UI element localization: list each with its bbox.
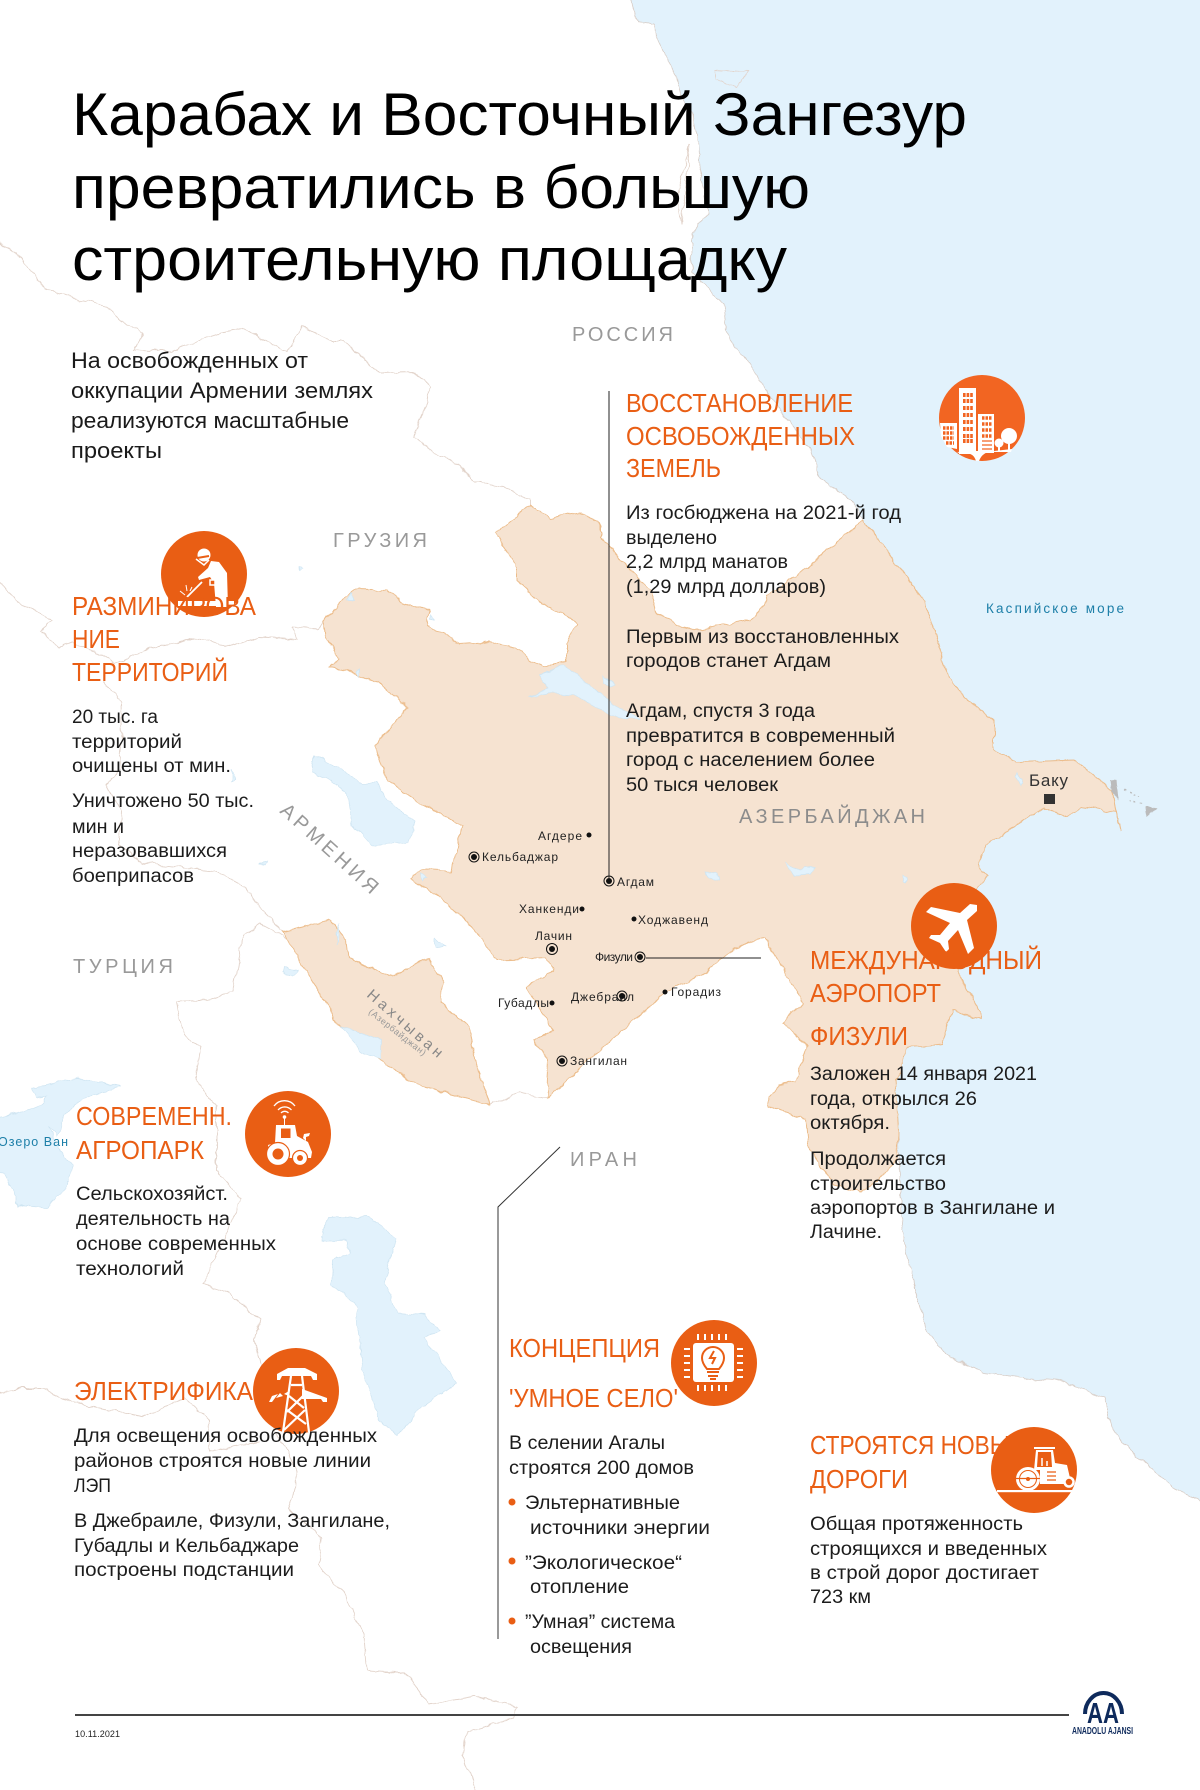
label: Baku: Баку xyxy=(1029,771,1068,790)
heading: agropark xyxy=(76,1103,232,1165)
city: Agdere: Агдере xyxy=(538,829,582,843)
icon: road roller xyxy=(991,1427,1077,1513)
text: electrification body: В Джебраиле, Физули, Зангилане, xyxy=(74,1511,390,1532)
icon: demining worker xyxy=(161,531,247,617)
text: airport body: аэропортов в Зангилане и xyxy=(810,1198,1055,1219)
panel: electrification xyxy=(74,1348,390,1581)
leader line: smart village xyxy=(498,1147,560,1639)
label: Baku xyxy=(1029,771,1068,804)
text: agropark body: основе современных xyxy=(76,1234,277,1255)
heading: restoration: ВОССТАНОВЛЕНИЕ xyxy=(626,390,853,418)
text: airport body: строительство xyxy=(810,1174,946,1195)
heading: smart village: 'УМНОЕ СЕЛО' xyxy=(509,1385,678,1413)
lakes xyxy=(0,566,1022,1435)
heading: smart village: КОНЦЕПЦИЯ xyxy=(509,1335,660,1363)
text: restoration body: городов станет Агдам xyxy=(626,651,831,672)
city: Zangilan: Зангилан xyxy=(570,1054,627,1068)
text: roads body: в строй дорог достигает xyxy=(810,1563,1039,1584)
text: airport body xyxy=(810,1064,1055,1243)
panel: smart village xyxy=(508,1320,757,1658)
city: Agdam: Агдам xyxy=(617,875,654,889)
text: smart village intro: строятся 200 домов xyxy=(509,1458,694,1479)
logo: Anadolu Ajansi: AA xyxy=(1087,1698,1119,1730)
text: smart village intro: В селении Агалы xyxy=(509,1433,665,1454)
label: Turkey: ТУРЦИЯ xyxy=(73,956,173,978)
text: roads body xyxy=(810,1514,1048,1608)
text: airport body: Заложен 14 января 2021 xyxy=(810,1064,1037,1085)
text: demining body: 20 тыс. га xyxy=(72,707,158,728)
intro text xyxy=(71,348,373,463)
intro text: реализуются масштабные xyxy=(71,408,349,433)
text: restoration body: 2,2 млрд манатов xyxy=(626,552,788,573)
text: airport body: Продолжается xyxy=(810,1149,946,1170)
logo: Anadolu Ajansi xyxy=(1072,1693,1133,1737)
panel: agropark xyxy=(76,1091,331,1280)
heading: airport: МЕЖДУНАРОДНЫЙ xyxy=(810,945,1042,975)
panel: restoration xyxy=(626,375,1025,796)
icon: chip with lightbulb xyxy=(671,1320,757,1406)
heading: roads: ДОРОГИ xyxy=(810,1466,908,1494)
text: demining body: мин и xyxy=(72,817,124,838)
Caspian Sea xyxy=(627,0,1200,1510)
text: demining body: боеприпасов xyxy=(72,866,194,887)
text: airport body: октября. xyxy=(810,1113,890,1134)
Azerbaijan xyxy=(323,505,1120,1192)
title: Карабах и Восточный Зангезур xyxy=(72,81,967,148)
heading: airport xyxy=(810,945,1042,1051)
icon: smart tractor xyxy=(245,1091,331,1177)
text: demining body: неразовавшихся xyxy=(72,841,227,862)
icon: airplane xyxy=(911,883,997,969)
text: restoration body: город с населением более xyxy=(626,750,875,771)
text: restoration body: Из госбюджена на 2021-й год xyxy=(626,503,901,524)
text: electrification body: районов строятся новые линии xyxy=(74,1451,371,1472)
bullet: alternative energy: Эльтернативные xyxy=(525,1493,680,1514)
bullet: smart lighting xyxy=(508,1612,675,1658)
footer rule xyxy=(75,1714,1069,1716)
title xyxy=(72,81,967,293)
title: превратились в большую xyxy=(72,154,810,221)
map labels xyxy=(0,324,1124,1171)
panel: demining xyxy=(72,531,256,887)
bullet: smart lighting: освещения xyxy=(530,1637,632,1658)
label: Georgia: ГРУЗИЯ xyxy=(333,530,427,552)
text: electrification body xyxy=(74,1426,390,1581)
bullet: ecological heating: ”Экологическое“ xyxy=(525,1553,682,1574)
title: строительную площадку xyxy=(72,226,787,293)
country borders xyxy=(0,70,750,1790)
heading: roads xyxy=(810,1432,1025,1494)
text: demining body: очищены от мин. xyxy=(72,756,231,777)
text: restoration body: 50 тыся человек xyxy=(626,775,779,796)
heading: agropark: СОВРЕМЕНН. xyxy=(76,1103,232,1131)
date: 10.11.2021 xyxy=(75,1729,120,1739)
leader line: Fizuli xyxy=(646,957,761,959)
label: Russia: РОССИЯ xyxy=(572,324,673,346)
label: Iran: ИРАН xyxy=(570,1149,637,1171)
Nakhchivan xyxy=(283,920,490,1105)
label: Azerbaijan: АЗЕРБАЙДЖАН xyxy=(739,804,925,828)
text: electrification body: Губадлы и Кельбаджаре xyxy=(74,1536,299,1557)
text: roads body: строящихся и введенных xyxy=(810,1539,1048,1560)
heading: demining: НИЕ xyxy=(72,626,120,654)
city: Jabrail: Джебраил xyxy=(571,990,634,1004)
panel: roads xyxy=(810,1427,1077,1608)
icon: city buildings xyxy=(939,375,1025,461)
text: smart village intro xyxy=(509,1433,694,1479)
label: Caspian Sea: Каспийское море xyxy=(986,601,1124,616)
label: Azerbaijan small: (Азербайджан) xyxy=(367,1007,428,1058)
text: airport body: года, открылся 26 xyxy=(810,1089,977,1110)
heading: electrification: ЭЛЕКТРИФИКА xyxy=(74,1378,253,1406)
bullet: smart lighting: ”Умная” система xyxy=(525,1612,675,1633)
text: restoration body: превратится в современный xyxy=(626,726,895,747)
intro text: оккупации Армении землях xyxy=(71,378,373,403)
heading: airport: ФИЗУЛИ xyxy=(810,1023,908,1051)
city markers xyxy=(469,829,721,1068)
intro text: проекты xyxy=(71,438,162,463)
panel: airport xyxy=(810,883,1055,1243)
heading: demining: ТЕРРИТОРИЙ xyxy=(72,657,228,687)
text: agropark body: Сельскохозяйст. xyxy=(76,1184,228,1205)
text: restoration body: Первым из восстановленных xyxy=(626,627,900,648)
city: Gubadly: Губадлы xyxy=(498,996,549,1010)
heading: agropark: АГРОПАРК xyxy=(76,1137,204,1165)
icon: power pylon xyxy=(253,1348,339,1434)
label: Armenia: АРМЕНИЯ xyxy=(276,799,383,899)
text: restoration body: Агдам, спустя 3 года xyxy=(626,701,815,722)
label: Nakhchivan: Нахчыван xyxy=(363,986,446,1061)
heading: restoration: ЗЕМЕЛЬ xyxy=(626,455,721,483)
text: demining body xyxy=(72,707,254,887)
text: restoration body: (1,29 млрд долларов) xyxy=(626,577,826,598)
text: roads body: Общая протяженность xyxy=(810,1514,1023,1535)
bullet: alternative energy: источники энергии xyxy=(530,1518,710,1539)
heading: restoration xyxy=(626,390,855,483)
text: agropark body: технологий xyxy=(76,1259,184,1280)
city: Lachin: Лачин xyxy=(535,929,572,943)
logo: Anadolu Ajansi: ANADOLU AJANSI xyxy=(1072,1726,1133,1737)
text: agropark body xyxy=(76,1184,277,1280)
Absheron islands xyxy=(1111,781,1156,817)
text: demining body: Уничтожено 50 тыс. xyxy=(72,791,254,812)
text: agropark body: деятельность на xyxy=(76,1209,230,1230)
leader line: Agdam xyxy=(608,391,610,878)
heading: smart village xyxy=(509,1335,678,1413)
city: Khankendi: Ханкенди xyxy=(519,902,579,916)
text: electrification body: ЛЭП xyxy=(74,1476,111,1497)
heading: roads: СТРОЯТСЯ НОВЫЕ xyxy=(810,1432,1025,1460)
bullet: ecological heating xyxy=(508,1553,682,1598)
label: Lake Van: Озеро Ван xyxy=(0,1135,68,1149)
text: restoration body: выделено xyxy=(626,528,717,549)
text: electrification body: построены подстанции xyxy=(74,1560,294,1581)
city: Khojavend: Ходжавенд xyxy=(638,913,708,927)
city: Fizuli: Физули xyxy=(595,950,633,964)
heading: restoration: ОСВОБОЖДЕННЫХ xyxy=(626,423,855,451)
heading: demining xyxy=(72,593,256,687)
heading: demining: РАЗМИНИРОВА xyxy=(72,593,256,621)
text: restoration body xyxy=(626,503,901,796)
city: Lachin xyxy=(535,929,572,954)
intro text: На освобожденных от xyxy=(71,348,308,373)
text: roads body: 723 км xyxy=(810,1587,871,1608)
heading: airport: АЭРОПОРТ xyxy=(810,980,941,1008)
city: Kelbajar: Кельбаджар xyxy=(482,850,558,864)
text: electrification body: Для освещения освобожденных xyxy=(74,1426,378,1447)
bullet: ecological heating: отопление xyxy=(530,1577,629,1598)
bullet: alternative energy xyxy=(508,1493,710,1539)
text: demining body: территорий xyxy=(72,732,182,753)
text: airport body: Лачине. xyxy=(810,1222,882,1243)
city: Horadiz: Горадиз xyxy=(671,985,721,999)
